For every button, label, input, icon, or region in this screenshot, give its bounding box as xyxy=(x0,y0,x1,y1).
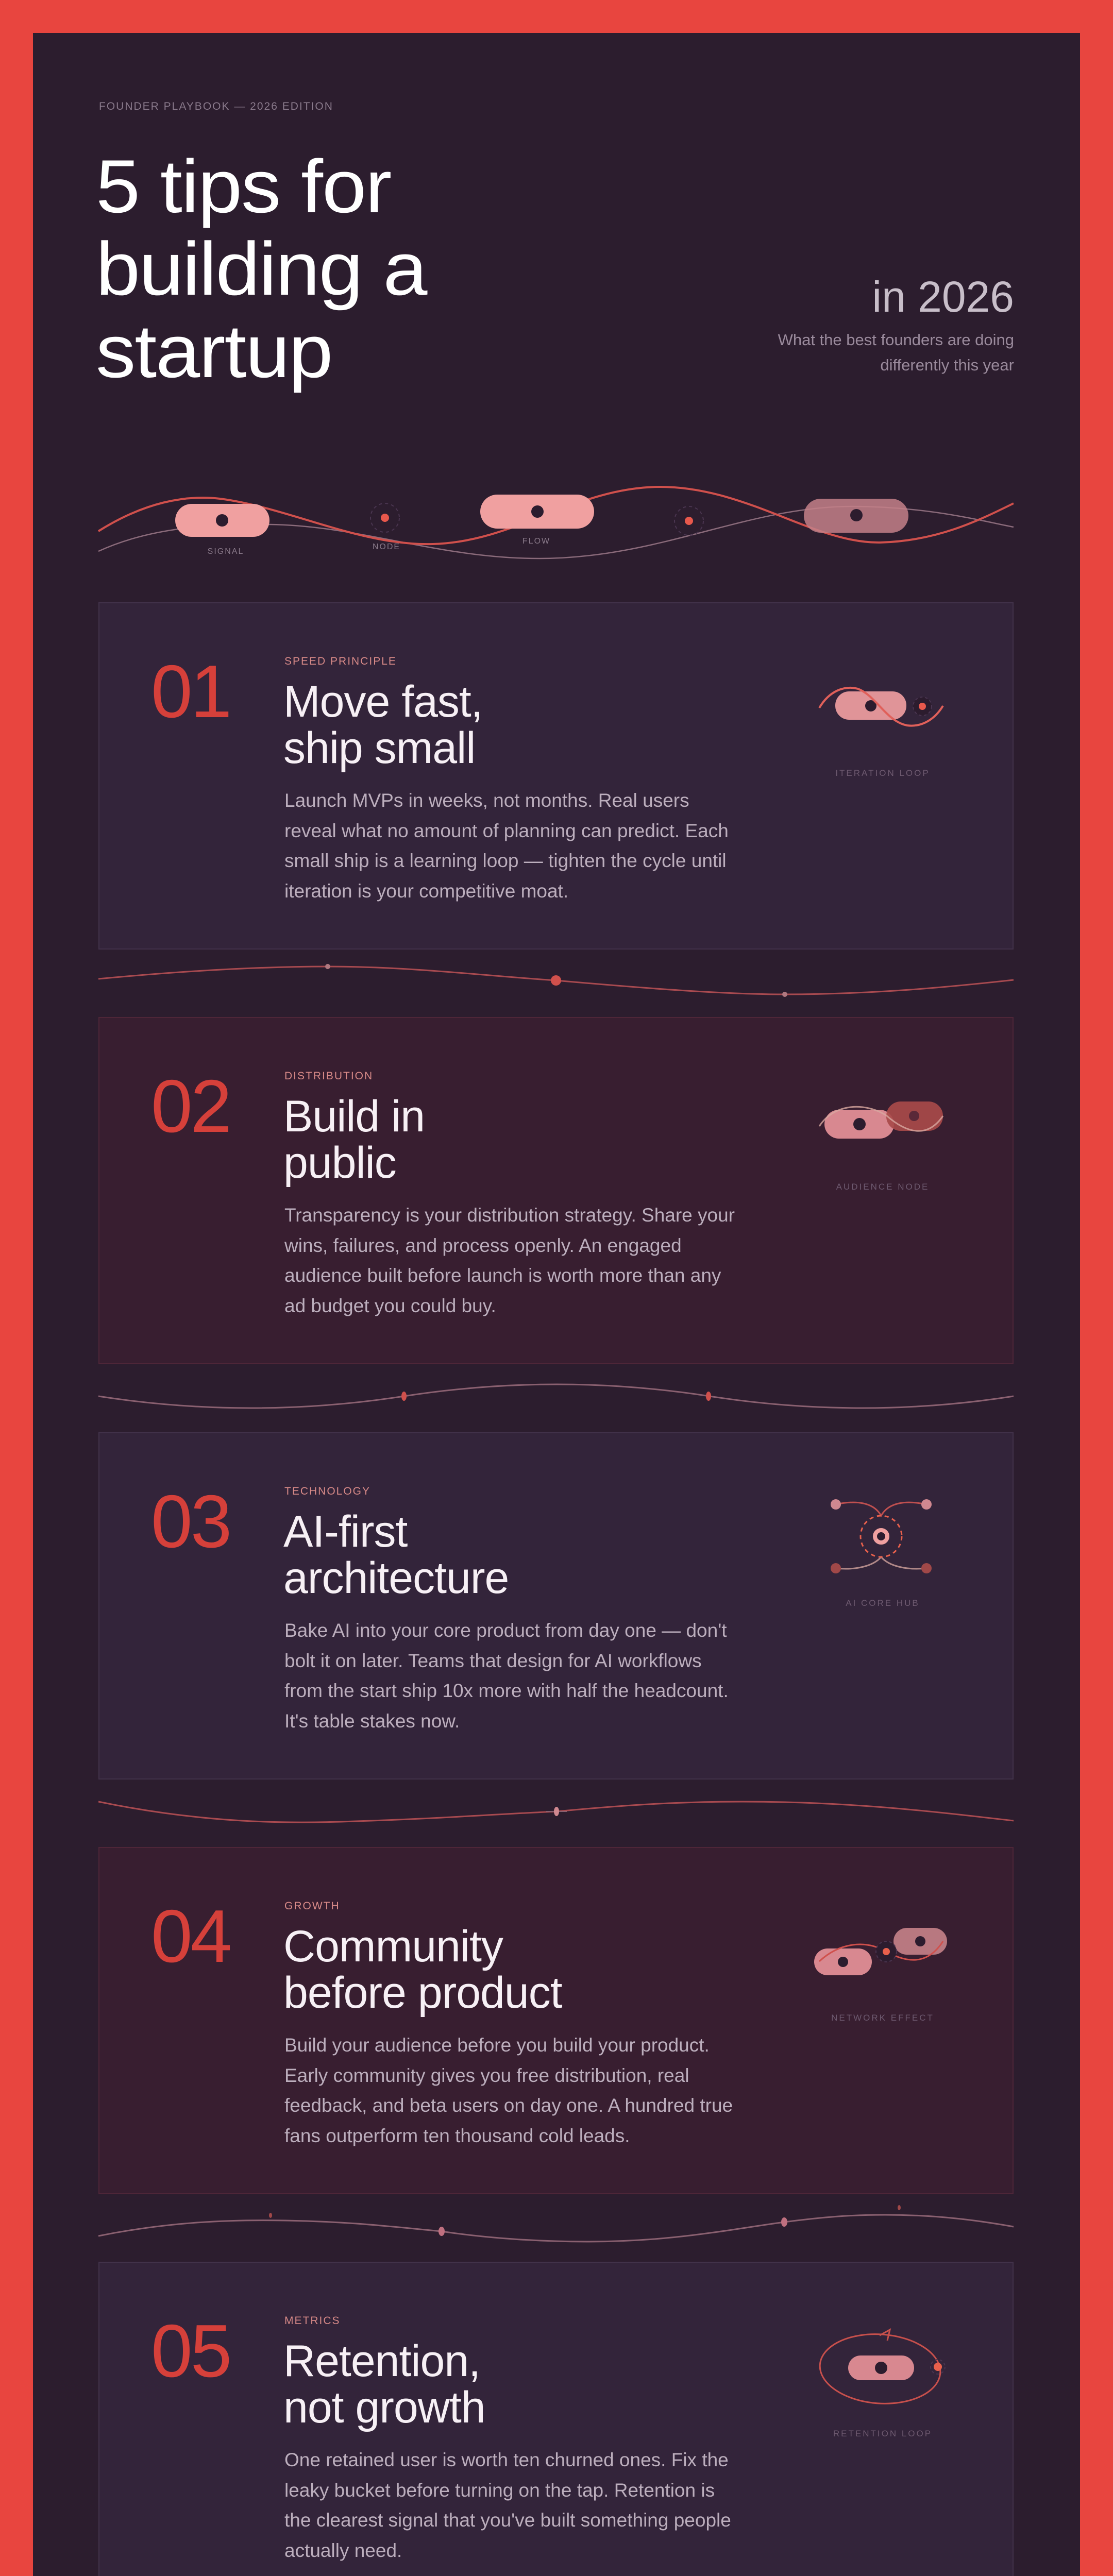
heading: Move fast, xyxy=(283,677,483,726)
body text: Early community gives you free distribution, real xyxy=(284,2065,689,2086)
icon: network effect xyxy=(814,1928,947,1975)
body text: Launch MVPs in weeks, not months. Real users xyxy=(284,790,689,811)
number 01: 01 xyxy=(151,650,230,733)
body text: the clearest signal that you've built something people xyxy=(284,2510,731,2531)
pill: muted xyxy=(804,499,908,533)
heading xyxy=(283,1922,563,2018)
label: TECHNOLOGY xyxy=(284,1485,370,1497)
body text: reveal what no amount of planning can predict. Each xyxy=(284,820,729,841)
body text xyxy=(284,2449,731,2561)
heading: Retention, xyxy=(283,2336,480,2386)
title xyxy=(96,144,428,393)
heading: public xyxy=(283,1138,396,1188)
number 03: 03 xyxy=(151,1480,230,1563)
heading xyxy=(283,1507,509,1603)
title: 5 tips for xyxy=(96,144,391,228)
card 05 xyxy=(98,2262,1014,2576)
heading: architecture xyxy=(283,1553,509,1603)
icon label: AUDIENCE NODE xyxy=(836,1182,929,1192)
body text: ad budget you could buy. xyxy=(284,1295,496,1316)
body text: fans outperform ten thousand cold leads. xyxy=(284,2125,630,2146)
heading: not growth xyxy=(283,2383,485,2432)
body text xyxy=(284,1205,735,1316)
wave labels: NODE xyxy=(373,543,400,551)
body text: One retained user is worth ten churned ones. Fix the xyxy=(284,2449,729,2470)
body text: feedback, and beta users on day one. A hundred true xyxy=(284,2095,733,2116)
heading xyxy=(283,1092,425,1188)
label: GROWTH xyxy=(284,1900,340,1912)
icon: iteration loop xyxy=(819,688,943,726)
heading xyxy=(283,2336,485,2432)
heading: AI-first xyxy=(283,1507,407,1556)
heading xyxy=(283,677,483,773)
icon: AI core hub xyxy=(831,1499,932,1573)
separator wave 1 xyxy=(98,964,1014,997)
icon label: AI CORE HUB xyxy=(846,1598,920,1608)
body text: iteration is your competitive moat. xyxy=(284,880,568,902)
subtitle text: What the best founders are doing xyxy=(778,331,1014,349)
subtitle: in 2026: in 2026 xyxy=(872,273,1014,321)
body text: from the start ship 10x more with half the headcount. xyxy=(284,1680,729,1701)
pill: flow xyxy=(480,495,594,529)
wave labels xyxy=(208,537,550,556)
body text: Bake AI into your core product from day one — don't xyxy=(284,1620,727,1641)
node 2 xyxy=(674,506,703,535)
separator wave 3 xyxy=(98,1802,1014,1822)
body text xyxy=(284,790,729,902)
icon: audience node xyxy=(819,1101,943,1139)
body text: leaky bucket before turning on the tap. Retention is xyxy=(284,2479,715,2501)
label: DISTRIBUTION xyxy=(284,1070,373,1082)
body text: It's table stakes now. xyxy=(284,1710,460,1731)
icon label: ITERATION LOOP xyxy=(835,768,930,778)
title: startup xyxy=(96,309,332,393)
icon label: RETENTION LOOP xyxy=(833,2429,932,2438)
heading: before product xyxy=(283,1968,562,2018)
separator wave 2 xyxy=(98,1384,1014,1408)
card 03 xyxy=(98,1432,1014,1780)
body text xyxy=(284,1620,729,1731)
card 04 xyxy=(98,1847,1014,2194)
body text: Build your audience before you build your product. xyxy=(284,2035,710,2056)
wave labels: FLOW xyxy=(522,537,550,546)
subtitle text: differently this year xyxy=(880,356,1014,374)
body text xyxy=(284,2035,733,2146)
number 05: 05 xyxy=(151,2309,230,2393)
icon: retention loop xyxy=(818,2330,945,2408)
heading: Build in xyxy=(283,1092,425,1141)
wave labels: SIGNAL xyxy=(208,547,244,556)
heading: Community xyxy=(283,1922,503,1971)
body text: wins, failures, and process openly. An engaged xyxy=(284,1234,682,1256)
pill: signal xyxy=(175,504,269,537)
body text: audience built before launch is worth more than any xyxy=(284,1265,721,1286)
label: SPEED PRINCIPLE xyxy=(284,655,397,667)
body text: Transparency is your distribution strategy. Share your xyxy=(284,1205,735,1226)
card 02 xyxy=(98,1017,1014,1364)
icon label: NETWORK EFFECT xyxy=(831,2013,934,2023)
title: building a xyxy=(96,227,426,311)
heading: ship small xyxy=(283,723,475,773)
card 01 xyxy=(98,602,1014,950)
body text: bolt it on later. Teams that design for AI workflows xyxy=(284,1650,702,1671)
kicker: founder playbook: FOUNDER PLAYBOOK — 2026 EDITION xyxy=(99,100,333,112)
subtitle text xyxy=(778,331,1014,374)
body text: actually need. xyxy=(284,2540,402,2561)
body text: small ship is a learning loop — tighten the cycle until xyxy=(284,850,727,871)
separator wave 4 xyxy=(98,2205,1014,2242)
node 1 xyxy=(370,503,399,532)
number 04: 04 xyxy=(151,1894,230,1978)
number 02: 02 xyxy=(151,1064,230,1148)
label: METRICS xyxy=(284,2315,340,2327)
header wave diagram xyxy=(98,487,1014,558)
